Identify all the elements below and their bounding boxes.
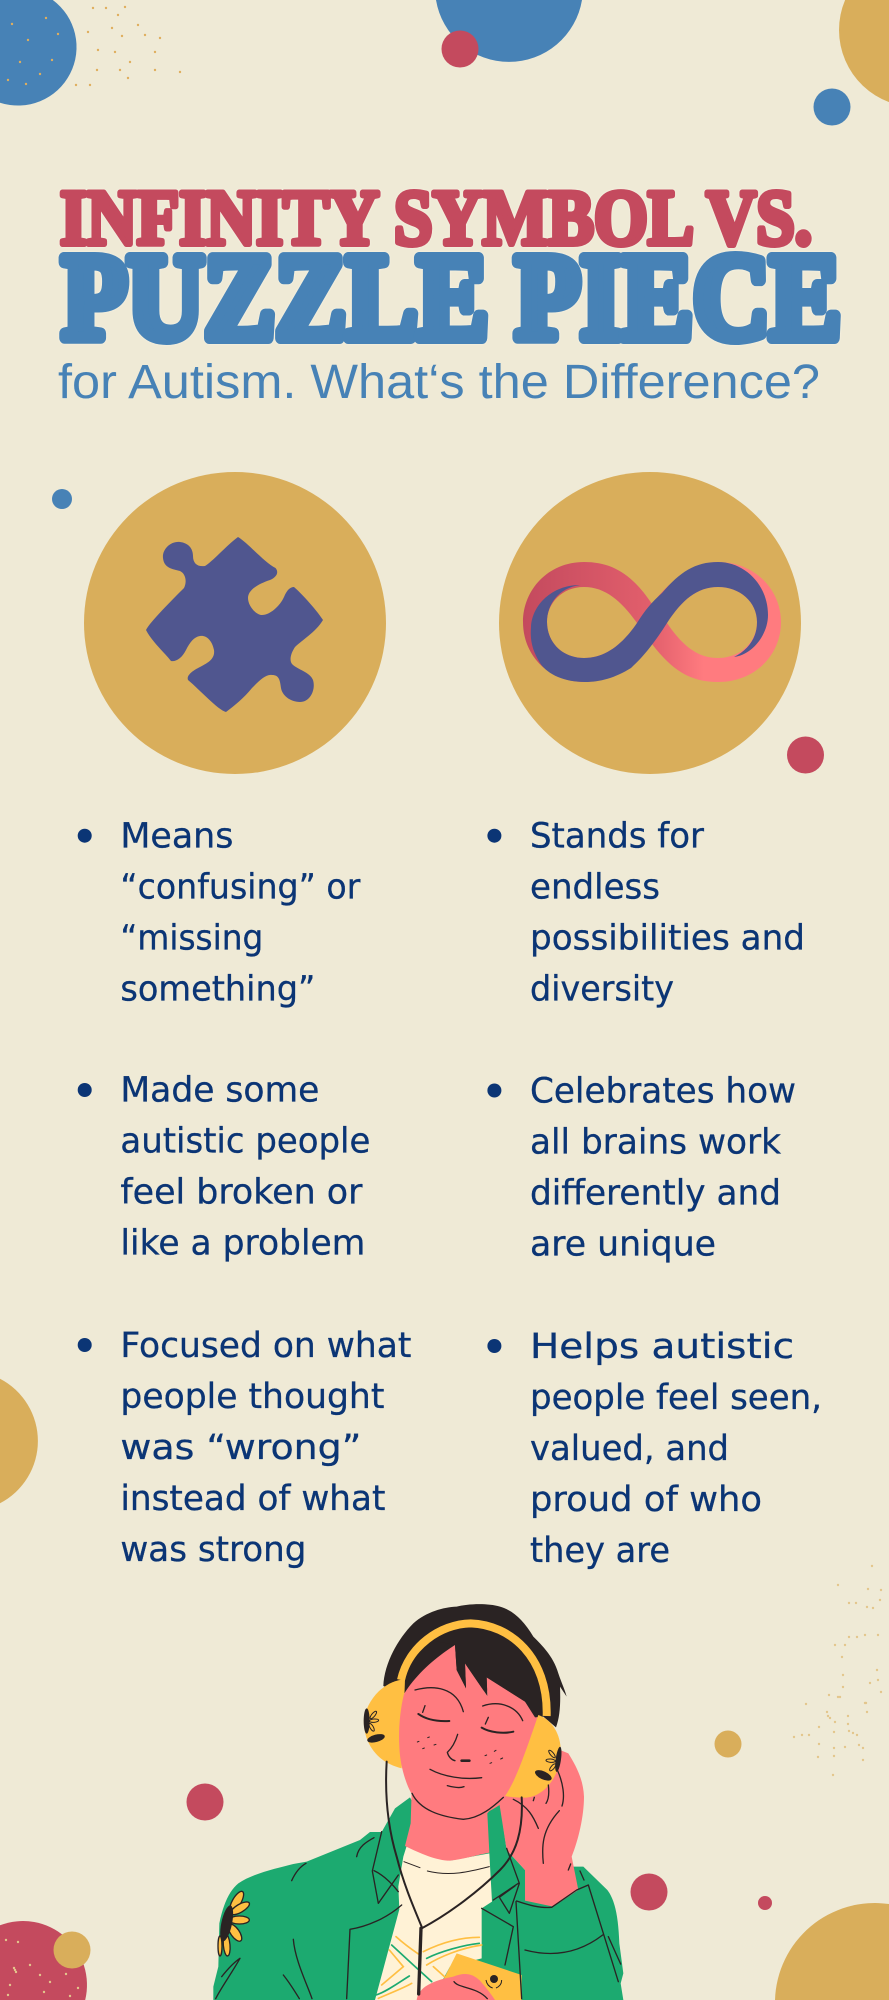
left ear cup flower [364,1708,386,1744]
bullet 2 left: autistic people [120,1122,370,1162]
bullet 1 left: something” [120,970,315,1010]
panel: puzzle piece icon [84,472,386,774]
right list [487,817,822,1571]
headphone cord [386,1762,522,1928]
bullet 1 left: “missing [120,919,263,959]
bullet 3 left: people thought [120,1377,384,1417]
title [60,174,841,365]
right ear cup flower [533,1746,563,1783]
line details [216,1688,621,1999]
bullet 2 left: like a problem [120,1224,365,1264]
subtitle: for Autism. What‘s the Difference? [58,356,820,409]
freckles [417,1737,503,1763]
bullet 3 left [78,1326,411,1570]
bullet 3 left: Focused on what [120,1326,411,1366]
bullet 3 right: they are [530,1531,670,1571]
bullet 3 left: was strong [120,1530,306,1570]
bullet 1 right: possibilities and [530,919,805,959]
collar [404,1862,489,1874]
shirt pattern [376,1937,482,1998]
bullet 3 right: Helps autistic [530,1327,794,1367]
raised hand [499,1750,584,1907]
bullet 2 right: all brains work [530,1123,782,1163]
bullet 3 left: instead of what [120,1479,385,1519]
small red dot [787,736,824,774]
bullet 1 right [487,817,805,1010]
bullet 2 right: are unique [530,1225,716,1265]
bullet 1 left: Means [120,817,233,857]
icon: puzzle piece [146,537,323,712]
nose and mouth [412,1706,503,1819]
bullet 1 right: Stands for [530,817,705,857]
eyes [418,1714,513,1733]
eyebrows [415,1688,523,1721]
small blue dot [52,489,72,509]
decorative circles: top [0,0,889,126]
panel: infinity icon [499,472,801,774]
decorative circles: bottom [0,1379,889,2000]
phone camera [486,1975,502,1988]
bullet 3 right: proud of who [530,1480,762,1520]
bullet 1 left [78,817,361,1010]
jacket lines [216,1770,621,1999]
t-shirt [375,1846,492,2000]
face [399,1645,543,1819]
headband [401,1623,547,1716]
bullet 2 left: Made some [120,1071,319,1111]
bullet 3 right: valued, and [530,1429,729,1469]
bullet 2 right [487,1072,796,1265]
left ear cup [364,1679,405,1768]
jacket [213,1797,623,2000]
bullet 3 right [487,1327,822,1571]
illustration: person with headphones [213,1604,623,2000]
bullet 3 left: was “wrong” [120,1428,361,1468]
left list [78,817,411,1570]
bullet 2 left: feel broken or [120,1173,363,1213]
bullet 3 right: people feel seen, [530,1378,822,1418]
fringe [430,1627,543,1717]
bullet 1 left: “confusing” or [120,868,361,908]
title line 1: INFINITY SYMBOL VS. [60,174,812,261]
neck [405,1790,502,1861]
shoulder sunflower [218,1889,251,1956]
hair back [383,1604,567,1727]
bullet 1 right: diversity [530,970,674,1010]
icon: infinity ribbon back [523,562,781,682]
bullet 1 right: endless [530,868,660,908]
bullet 2 right: Celebrates how [530,1072,796,1112]
bullet 2 right: differently and [530,1174,781,1214]
bullet 2 left [78,1071,370,1264]
lower hand [417,1974,495,2000]
icon: infinity ribbon front [531,562,768,682]
phone [433,1953,522,2000]
right ear cup [505,1715,561,1798]
